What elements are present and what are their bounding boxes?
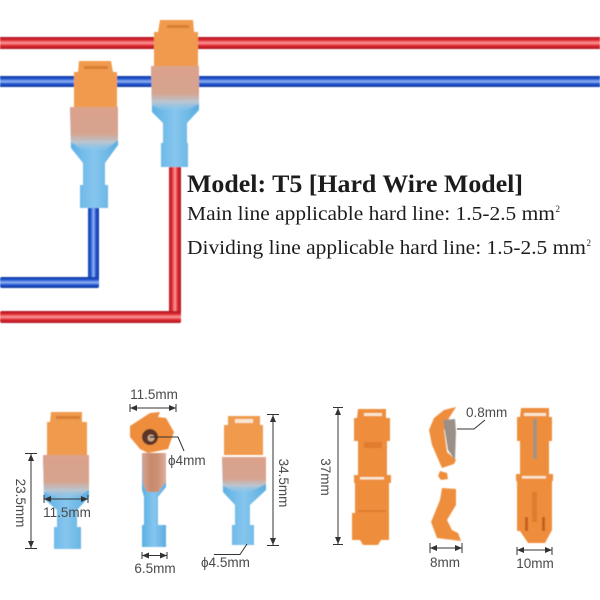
dividing line superscript: 2 [586,238,591,248]
dimension 10mm [516,547,554,571]
dimension phi 4.5mm [201,544,250,570]
blue branch wire [0,205,99,288]
connector rear view [222,416,266,545]
dimension phi 4mm [150,437,206,468]
dimension 0.8mm [457,405,507,429]
dimension 11.5mm top [130,387,178,412]
dimension 34.5mm: 34.5mm [276,459,291,507]
orange shell profile view [429,407,461,541]
right connector [151,20,199,167]
dimension 0.8mm: 0.8mm [466,405,507,420]
connector side view [130,412,174,547]
dimension 6.5mm: 6.5mm [134,561,176,576]
left connector [70,61,118,208]
model heading: Model: T5 [Hard Wire Model] [187,171,523,198]
red main wire [0,37,600,49]
red branch wire [0,165,181,323]
dimension 10mm: 10mm [516,556,554,571]
dimension 6.5mm [134,552,176,576]
connector front view [43,412,89,549]
dimension 11.5mm lower: 11.5mm [43,505,91,520]
dimension 37mm [318,408,343,544]
dimension phi 4mm: ϕ4mm [168,453,206,468]
top wiring photo [0,20,600,323]
dimension 11.5mm lower [43,495,91,520]
dimension 8mm [430,543,462,570]
dimension 37mm: 37mm [318,458,333,496]
dividing line spec: Dividing line applicable hard line: 1.5-2.5 mm [187,238,586,259]
main line spec: Main line applicable hard line: 1.5-2.5 mm [187,204,555,225]
dimension 23.5mm: 23.5mm [13,479,28,527]
orange shell inner view [516,408,553,543]
dimension 8mm: 8mm [430,555,460,570]
dimension phi 4.5mm: ϕ4.5mm [201,555,250,570]
orange shell flat view [352,409,391,545]
blue main wire [0,76,600,87]
dimension 34.5mm [267,414,291,546]
dimension 23.5mm [13,454,37,548]
dimension 11.5mm top: 11.5mm [130,387,178,402]
main line superscript: 2 [556,204,560,214]
